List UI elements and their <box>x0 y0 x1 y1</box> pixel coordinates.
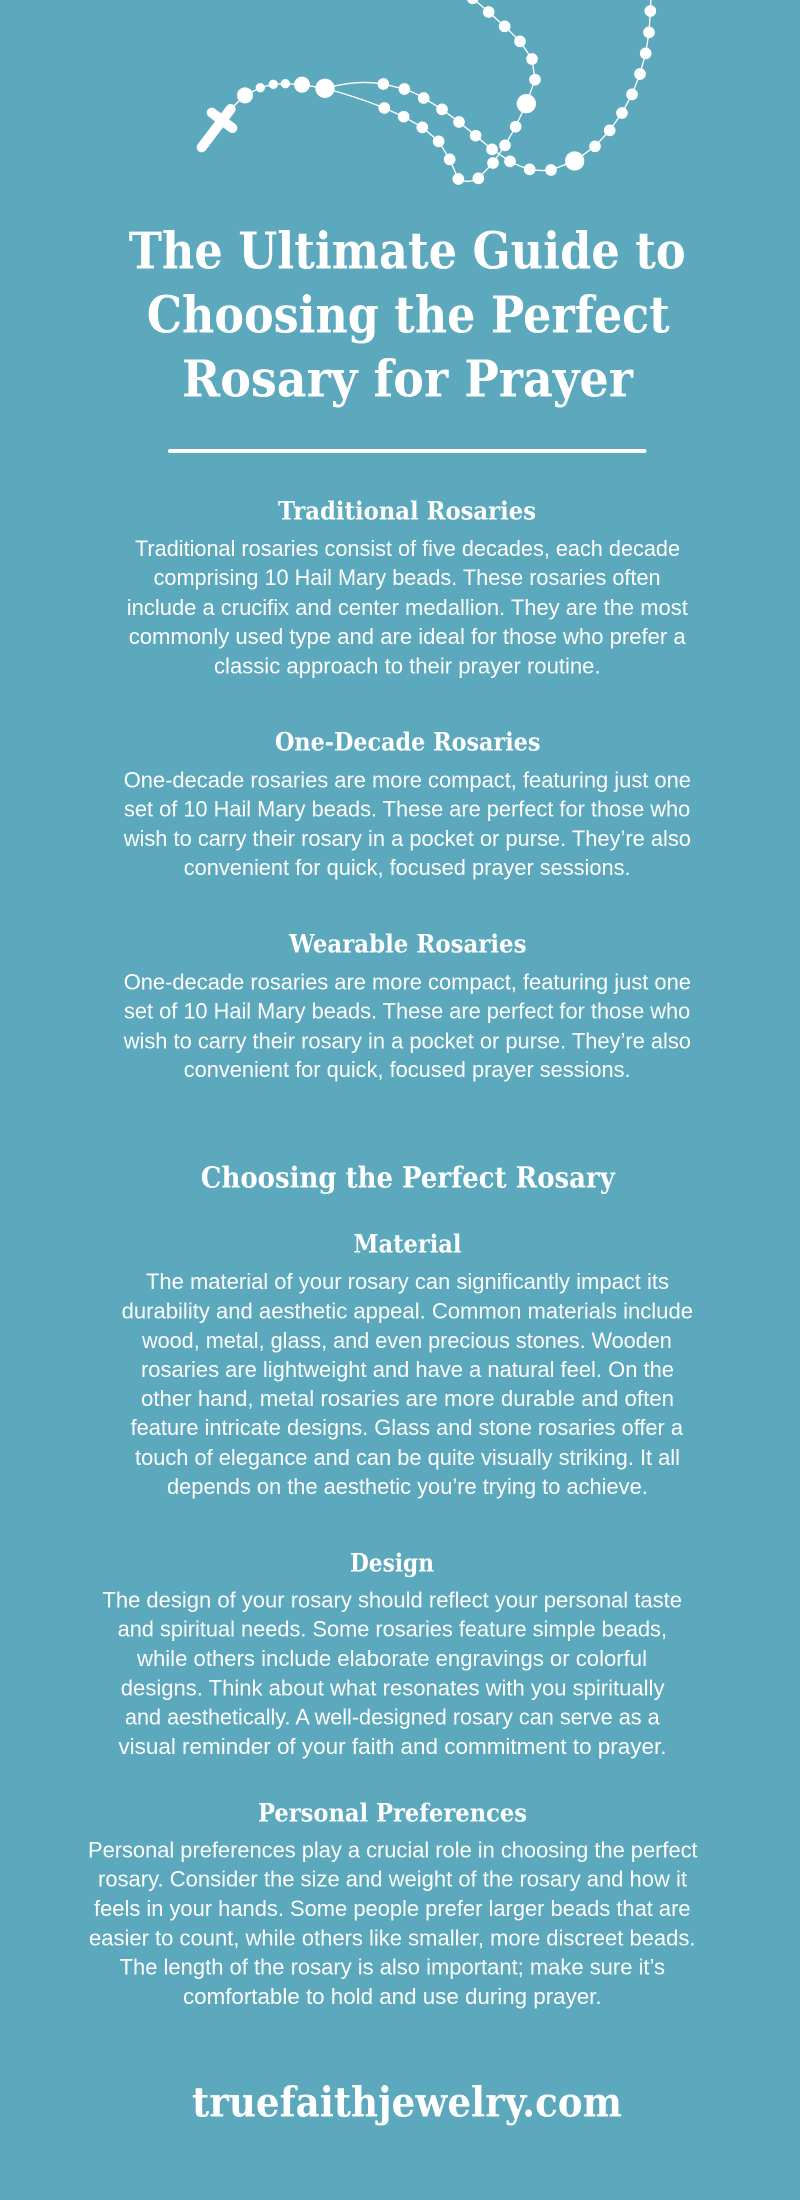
text: Material description <box>122 1269 693 1499</box>
section: Material <box>122 1230 693 1499</box>
text: Wearable Rosaries description: One-decade rosaries are more compact, featuring just one <box>124 969 691 994</box>
text: Personal Preferences description: rosary. Consider the size and weight of the rosary and how it <box>98 1867 688 1892</box>
text: Personal Preferences description: The length of the rosary is also important; make sure it’s <box>120 1955 665 1980</box>
title: Choosing the Perfect <box>147 285 670 344</box>
text: Wearable Rosaries description: set of 10 Hail Mary beads. These are perfect for those who <box>124 998 690 1023</box>
section: One-Decade Rosaries <box>123 728 691 880</box>
text: Personal Preferences description <box>88 1838 698 2009</box>
text: Wearable Rosaries description: wish to carry their rosary in a pocket or purse. They’re also <box>123 1028 691 1053</box>
text: Material description: wood, metal, glass, and even precious stones. Wooden <box>141 1328 672 1353</box>
icon: rosary with crucifix <box>202 0 656 185</box>
heading: Traditional Rosaries: Traditional Rosaries <box>278 496 536 526</box>
text: Design description: The design of your rosary should reflect your personal taste <box>102 1588 682 1613</box>
title: Rosary for Prayer <box>182 350 634 409</box>
heading: Material: Material <box>354 1230 462 1260</box>
heading: Personal Preferences: Personal Preferences <box>258 1799 527 1829</box>
text: Traditional Rosaries description <box>127 536 689 678</box>
text: One-Decade Rosaries description: One-decade rosaries are more compact, featuring just one <box>124 767 691 792</box>
text: Traditional Rosaries description: include a crucifix and center medallion. They are the most <box>127 595 689 620</box>
text: One-Decade Rosaries description: convenient for quick, focused prayer sessions. <box>184 855 631 880</box>
footer: website URL: truefaithjewelry.com <box>192 2078 622 2127</box>
text: Design description: visual reminder of your faith and commitment to prayer. <box>118 1734 666 1759</box>
text: Material description: other hand, metal rosaries are more durable and often <box>141 1386 674 1411</box>
title: The Ultimate Guide to <box>129 221 686 280</box>
section: Wearable Rosaries <box>123 930 691 1082</box>
text: Personal Preferences description: comfortable to hold and use during prayer. <box>183 1984 602 2009</box>
text: Wearable Rosaries description <box>123 969 691 1082</box>
text: Traditional Rosaries description: comprising 10 Hail Mary beads. These rosaries often <box>154 565 661 590</box>
text: Design description: designs. Think about what resonates with you spiritually <box>121 1676 665 1701</box>
section: Design <box>102 1549 682 1759</box>
title divider <box>168 449 646 453</box>
section: Traditional Rosaries <box>127 496 689 678</box>
text: One-Decade Rosaries description <box>123 767 691 880</box>
text: Design description <box>102 1588 682 1759</box>
title <box>129 221 686 409</box>
heading: Wearable Rosaries: Wearable Rosaries <box>288 930 526 960</box>
text: One-Decade Rosaries description: set of 10 Hail Mary beads. These are perfect for those who <box>124 797 690 822</box>
text: Material description: depends on the aesthetic you’re trying to achieve. <box>167 1474 648 1499</box>
text: Wearable Rosaries description: convenient for quick, focused prayer sessions. <box>184 1057 631 1082</box>
text: Material description: rosaries are lightweight and have a natural feel. On the <box>141 1357 674 1382</box>
text: Personal Preferences description: Personal preferences play a crucial role in choosing the perfect <box>88 1838 698 1863</box>
heading: One-Decade Rosaries: One-Decade Rosaries <box>275 728 540 758</box>
text: Traditional Rosaries description: classic approach to their prayer routine. <box>214 653 601 678</box>
text: Material description: The material of your rosary can significantly impact its <box>146 1269 669 1294</box>
text: Traditional Rosaries description: commonly used type and are ideal for those who prefer a <box>129 624 686 649</box>
section: Personal Preferences <box>88 1799 698 2009</box>
text: Design description: and spiritual needs. Some rosaries feature simple beads, <box>118 1617 667 1642</box>
text: Material description: feature intricate designs. Glass and stone rosaries offer a <box>131 1415 684 1440</box>
text: Personal Preferences description: feels in your hands. Some people prefer larger beads that are <box>94 1896 691 1921</box>
heading: Design: Design <box>350 1549 434 1579</box>
text: Design description: while others include elaborate engravings or colorful <box>136 1646 647 1671</box>
text: Material description: touch of elegance and can be quite visually striking. It all <box>135 1445 680 1470</box>
text: One-Decade Rosaries description: wish to carry their rosary in a pocket or purse. They’re also <box>123 826 691 851</box>
text: Traditional Rosaries description: Traditional rosaries consist of five decades, each decade <box>135 536 680 561</box>
heading: Choosing the Perfect Rosary: Choosing the Perfect Rosary <box>201 1161 616 1195</box>
text: Personal Preferences description: easier to count, while others like smaller, more discreet beads. <box>89 1926 696 1951</box>
text: Design description: and aesthetically. A well-designed rosary can serve as a <box>125 1705 660 1730</box>
text: Material description: durability and aesthetic appeal. Common materials include <box>122 1298 693 1323</box>
